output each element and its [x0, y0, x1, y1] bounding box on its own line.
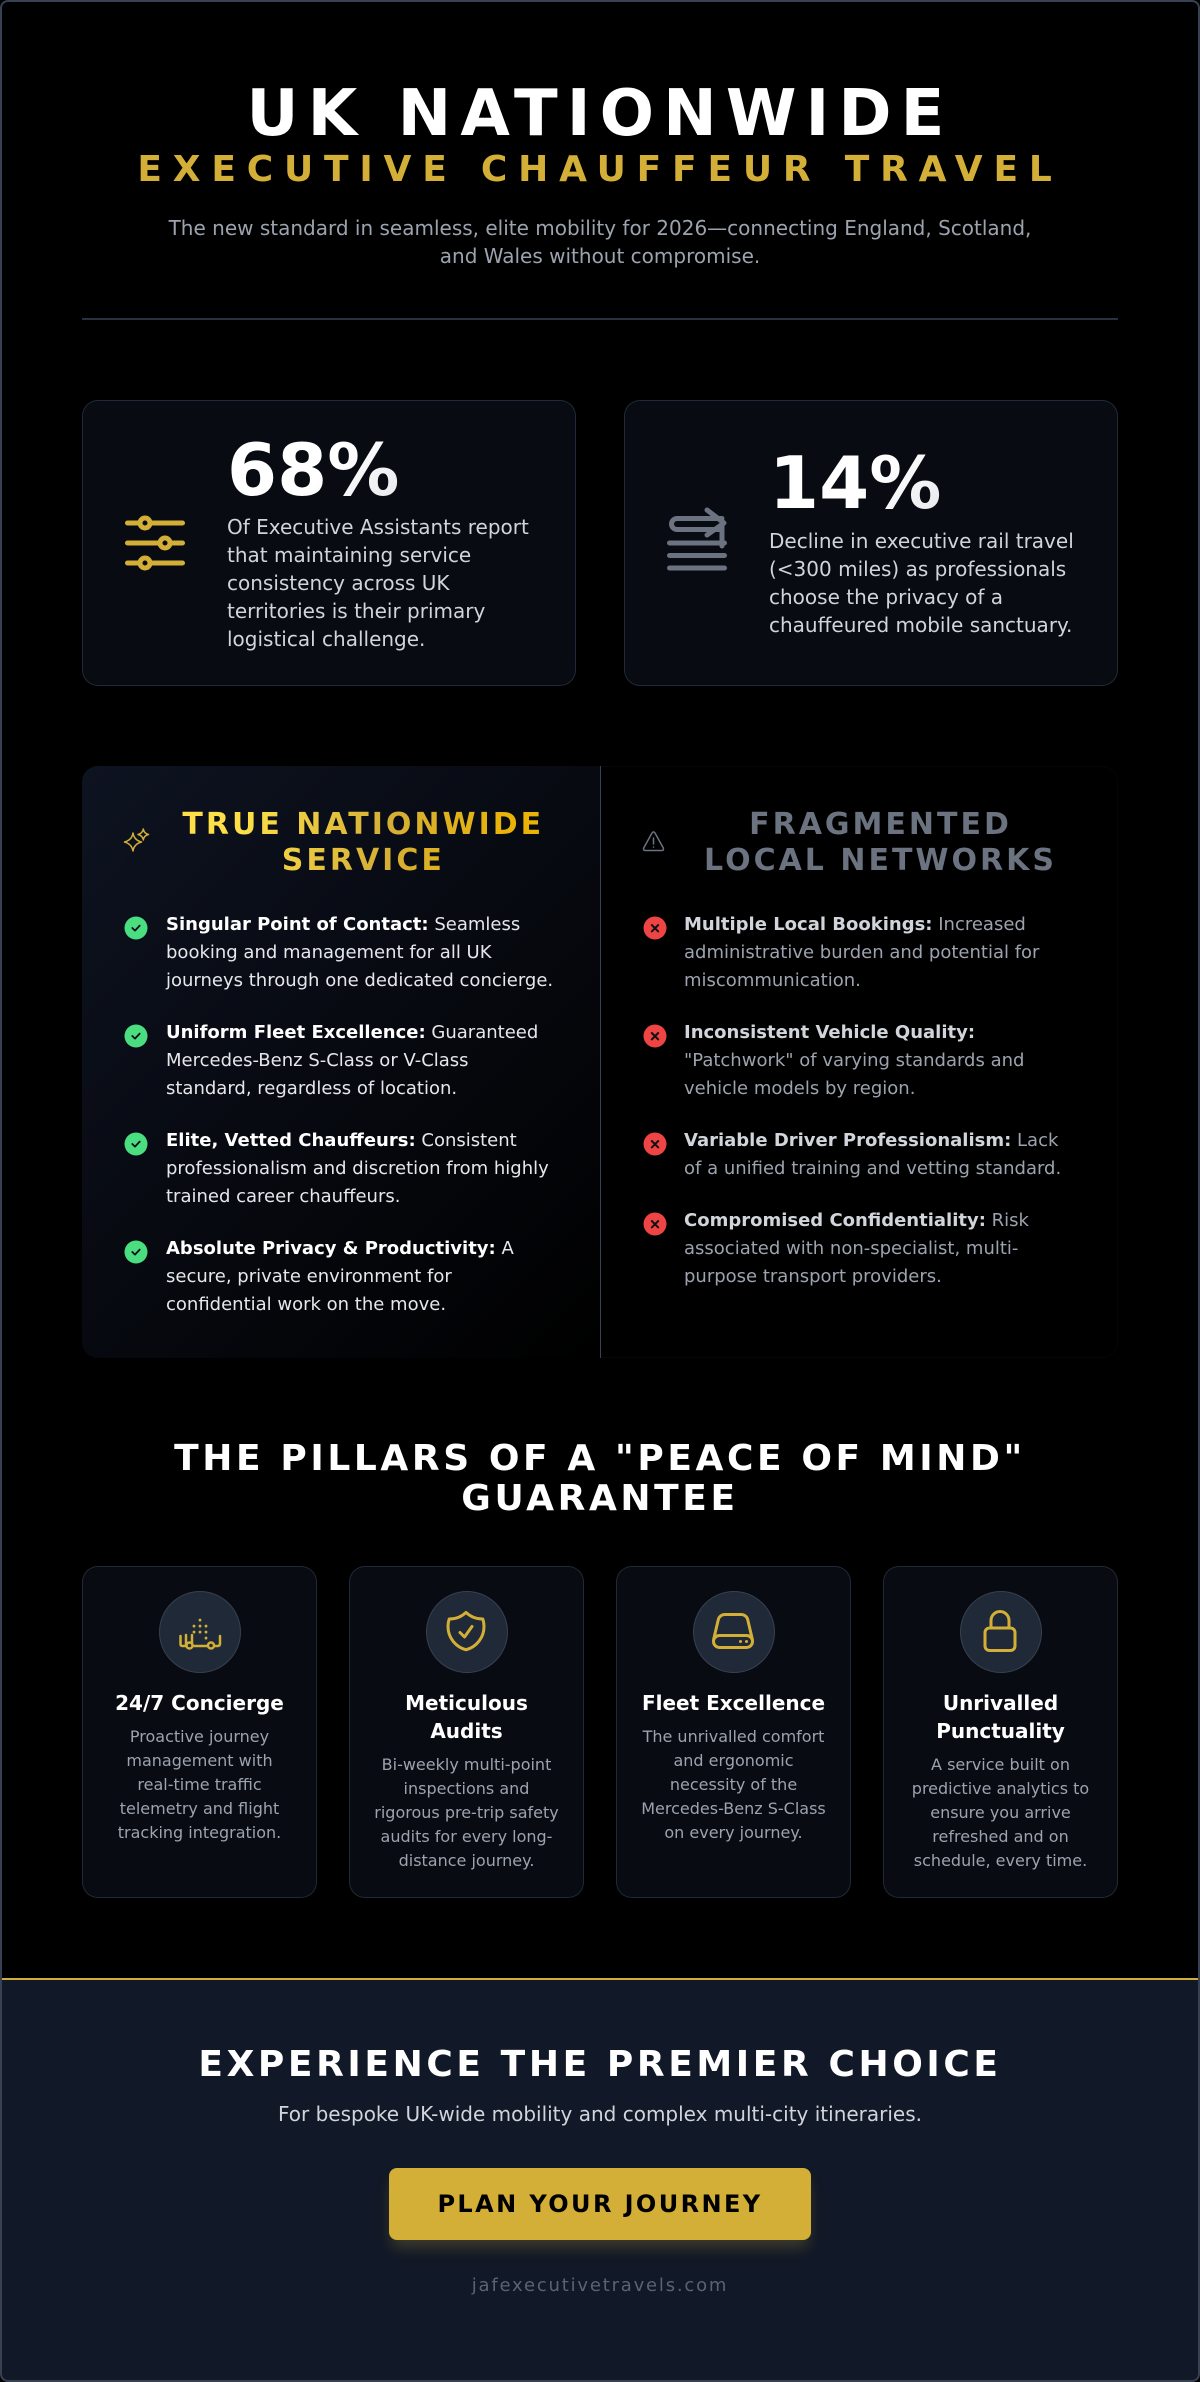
icon: check [124, 1024, 148, 1048]
drawback text: Inconsistent Vehicle Quality: [684, 1022, 975, 1043]
heading: SERVICE [282, 843, 445, 878]
call to action panel [2, 1978, 1198, 2380]
pillar description [641, 1727, 826, 1842]
pillar description: inspections and [404, 1779, 529, 1798]
benefit text: booking and management for all UK [166, 942, 492, 963]
pillar description: A service built on [931, 1755, 1070, 1774]
pillar description: Mercedes-Benz S-Class [641, 1799, 826, 1818]
pillar description: telemetry and flight [120, 1799, 279, 1818]
icon: cross [644, 1212, 666, 1236]
drawback text: purpose transport providers. [684, 1266, 942, 1287]
pillar description [118, 1727, 281, 1842]
website: jafexecutivetravels.com [472, 2275, 728, 2296]
pillar description: ensure you arrive [930, 1803, 1071, 1822]
benefit text: Absolute Privacy & Productivity: A [166, 1238, 514, 1259]
pillar title: Audits [430, 1719, 503, 1743]
benefit text: confidential work on the move. [166, 1294, 446, 1315]
icon: cross [644, 1024, 666, 1048]
pillar description: necessity of the [670, 1775, 797, 1794]
pillar description: audits for every long- [381, 1827, 552, 1846]
icon: shield check [426, 1591, 508, 1673]
benefit text: standard, regardless of location. [166, 1078, 457, 1099]
pillar title: Meticulous [405, 1691, 528, 1715]
icon: concierge [158, 1591, 240, 1673]
pillar description: and ergonomic [673, 1751, 794, 1770]
pillar description: tracking integration. [118, 1823, 281, 1842]
benefit text [166, 914, 553, 991]
stat number: 68% [227, 428, 399, 512]
heading: FRAGMENTED [749, 807, 1012, 842]
pillar description: refreshed and on [932, 1827, 1069, 1846]
drawback 3 [644, 1130, 1061, 1179]
pillars heading: GUARANTEE [461, 1478, 739, 1519]
pillars heading [174, 1438, 1026, 1519]
pillar description: management with [126, 1751, 273, 1770]
CTA heading: EXPERIENCE THE PREMIER CHOICE [198, 2044, 1002, 2085]
benefit text: Singular Point of Contact: Seamless [166, 914, 520, 935]
pillar description: rigorous pre-trip safety [374, 1803, 559, 1822]
benefit 2 [124, 1022, 538, 1099]
icon: cross [644, 1132, 666, 1156]
stat description: territories is their primary [227, 599, 485, 623]
header [137, 77, 1063, 268]
drawback text: vehicle models by region. [684, 1078, 915, 1099]
pillar: fleet [616, 1566, 851, 1898]
drawback text: Compromised Confidentiality: Risk [684, 1210, 1029, 1231]
heading: TRUE NATIONWIDE [182, 807, 544, 842]
drawback 2 [644, 1022, 1024, 1099]
pillar title: Fleet Excellence [642, 1691, 825, 1715]
pillar description: distance journey. [399, 1851, 534, 1870]
panel: true nationwide service [82, 766, 601, 1358]
drawback text: associated with non-specialist, multi- [684, 1238, 1018, 1259]
pillar description [374, 1755, 559, 1870]
intro text: and Wales without compromise. [440, 244, 760, 268]
benefit text [166, 1022, 538, 1099]
CTA button [389, 2168, 811, 2240]
benefit text: secure, private environment for [166, 1266, 452, 1287]
pillar description [912, 1755, 1089, 1870]
panel: stat 68% [82, 400, 576, 686]
stat description: consistency across UK [227, 571, 450, 595]
benefit text: trained career chauffeurs. [166, 1186, 400, 1207]
drawback 1 [644, 914, 1040, 991]
panel: stat 14% [624, 400, 1118, 686]
stat description [227, 515, 529, 651]
drawback text: administrative burden and potential for [684, 942, 1039, 963]
pillar title: 24/7 Concierge [115, 1691, 284, 1715]
title: UK NATIONWIDE [247, 77, 953, 151]
drawback text [684, 1210, 1029, 1287]
pillar description: schedule, every time. [914, 1851, 1087, 1870]
pillar description: real-time traffic [137, 1775, 262, 1794]
stat number: 14% [769, 441, 941, 525]
pillar title [936, 1691, 1065, 1743]
stat description: (<300 miles) as professionals [769, 557, 1066, 581]
pillar description: The unrivalled comfort [643, 1727, 824, 1746]
pillar: punctuality [883, 1566, 1118, 1898]
icon: check [124, 1240, 148, 1264]
stat description: logistical challenge. [227, 627, 425, 651]
benefit text: Mercedes-Benz S-Class or V-Class [166, 1050, 469, 1071]
benefit 3 [124, 1130, 549, 1207]
pillar title: Punctuality [936, 1719, 1065, 1743]
drawback text: Variable Driver Professionalism: Lack [684, 1130, 1058, 1151]
icon: rail decline [667, 508, 727, 570]
stat description: choose the privacy of a [769, 585, 1003, 609]
intro text [168, 216, 1031, 268]
icon: vehicle [692, 1591, 774, 1673]
pillar description: on every journey. [664, 1823, 803, 1842]
pillar description: predictive analytics to [912, 1779, 1089, 1798]
icon: check [124, 916, 148, 940]
icon: sparkles [124, 828, 150, 852]
benefit text: Uniform Fleet Excellence: Guaranteed [166, 1022, 538, 1043]
panel: fragmented local networks [601, 766, 1118, 1358]
benefit text: Elite, Vetted Chauffeurs: Consistent [166, 1130, 517, 1151]
heading [704, 807, 1057, 878]
benefit 1 [124, 914, 553, 991]
stat description [769, 529, 1074, 637]
pillar title: Unrivalled [943, 1691, 1058, 1715]
benefit text [166, 1238, 514, 1315]
benefit text [166, 1130, 549, 1207]
drawback text [684, 1130, 1061, 1179]
icon: warning [642, 831, 664, 852]
benefit 4 [124, 1238, 514, 1315]
drawback text: "Patchwork" of varying standards and [684, 1050, 1024, 1071]
benefit text: professionalism and discretion from highly [166, 1158, 549, 1179]
pillar title [405, 1691, 528, 1743]
stat description: that maintaining service [227, 543, 471, 567]
icon: check [124, 1132, 148, 1156]
CTA button: PLAN YOUR JOURNEY [437, 2190, 763, 2218]
heading [163, 807, 563, 879]
subtitle: EXECUTIVE CHAUFFEUR TRAVEL [137, 149, 1063, 190]
pillars heading: THE PILLARS OF A "PEACE OF MIND" [174, 1438, 1026, 1479]
drawback text [684, 914, 1040, 991]
pillar description: Proactive journey [130, 1727, 269, 1746]
intro text: The new standard in seamless, elite mobility for 2026—connecting England, Scotland, [169, 216, 1031, 240]
heading: LOCAL NETWORKS [704, 843, 1057, 878]
pillar: concierge [82, 1566, 317, 1898]
stat description: chauffeured mobile sanctuary. [769, 613, 1072, 637]
benefit text: journeys through one dedicated concierge. [166, 970, 553, 991]
drawback text: miscommunication. [684, 970, 861, 991]
CTA text: For bespoke UK-wide mobility and complex multi-city itineraries. [278, 2102, 922, 2126]
drawback text [684, 1022, 1024, 1099]
pillar: audits [349, 1566, 584, 1898]
stat description: Of Executive Assistants report [227, 515, 529, 539]
drawback 4 [644, 1210, 1029, 1287]
icon: sliders [125, 516, 185, 570]
stat description: Decline in executive rail travel [769, 529, 1074, 553]
drawback text: Multiple Local Bookings: Increased [684, 914, 1026, 935]
pillar description: Bi-weekly multi-point [382, 1755, 551, 1774]
icon: lock [960, 1591, 1042, 1673]
drawback text: of a unified training and vetting standard. [684, 1158, 1061, 1179]
icon: cross [644, 916, 666, 940]
